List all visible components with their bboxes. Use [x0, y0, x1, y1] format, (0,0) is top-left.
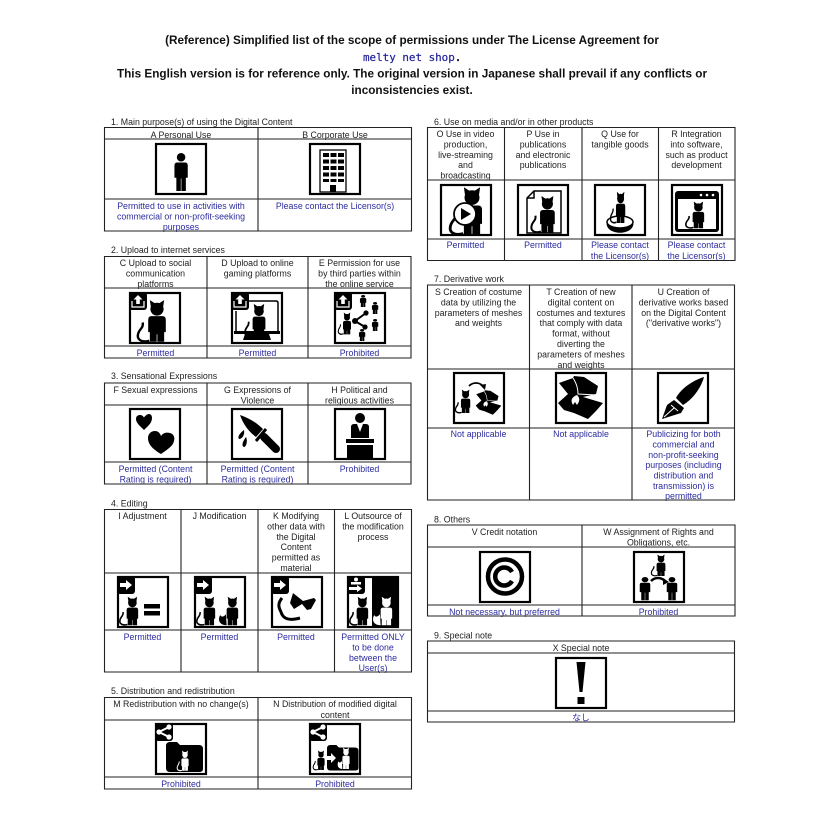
column U labels: Publicizing for both [646, 429, 721, 439]
icon: publication [518, 185, 568, 235]
column L labels: L Outsource of [344, 511, 402, 521]
column X labels: なし [572, 712, 590, 722]
heading: section 2: 2. Upload to internet services [111, 245, 226, 255]
column A labels: A Personal Use [151, 130, 211, 140]
column K labels: Permitted [277, 632, 315, 642]
column A labels: commercial or non-profit-seeking [117, 212, 245, 222]
heading: section 3: 3. Sensational Expressions [111, 371, 218, 381]
column Q labels: Q Use for [601, 129, 639, 139]
column U labels: distribution and [654, 471, 713, 481]
column P labels: and electronic [516, 150, 571, 160]
column Q labels: tangible goods [591, 139, 649, 149]
column E labels: Prohibited [340, 348, 379, 358]
column D labels: Permitted [239, 348, 276, 358]
title [117, 34, 707, 97]
heading: section 1: 1. Main purpose(s) of using the Digital Content [111, 117, 293, 127]
column R labels: such as product [665, 150, 728, 160]
column V labels: V Credit notation [472, 527, 537, 537]
column U labels: transmission) is [653, 481, 715, 491]
icon: assignment [634, 552, 684, 602]
title: This English version is for reference only. The original version in Japanese shall prevail if any conflicts or [117, 68, 707, 80]
icon: exclamation [556, 658, 606, 708]
icon: hearts [130, 409, 180, 459]
column V labels: Not necessary, but preferred [449, 607, 560, 617]
column N labels: Prohibited [315, 779, 355, 789]
column U labels: on the Digital Content [641, 308, 726, 318]
heading: section 9: 9. Special note [434, 630, 492, 640]
column L labels: the modification [342, 521, 404, 531]
icon: redistribution [155, 723, 206, 774]
column H labels [325, 385, 395, 474]
column A labels: purposes [163, 222, 200, 232]
icon: upload gaming [231, 292, 282, 343]
heading: section 7: 7. Derivative work [434, 274, 505, 284]
column P labels: Permitted [524, 240, 562, 250]
panel: 2. upload [104, 245, 411, 358]
column E labels [318, 258, 401, 358]
column M labels [113, 699, 249, 789]
column G labels: G Expressions of [224, 385, 292, 395]
column D labels [221, 258, 294, 358]
column S labels: and weights [455, 318, 503, 328]
column L labels: between the [349, 653, 397, 663]
column N labels: N Distribution of modified digital [273, 699, 397, 709]
column S labels: S Creation of costume [435, 287, 522, 297]
icon: copyright [480, 552, 530, 602]
column T labels: diverting the [557, 339, 605, 349]
column K labels [267, 511, 325, 642]
column V labels [449, 527, 560, 617]
column K labels: permitted as [272, 553, 321, 563]
column I labels: I Adjustment [118, 511, 167, 521]
panel: 8. others [428, 514, 735, 617]
title: (Reference) Simplified list of the scope of permissions under The License Agreement for [165, 34, 659, 47]
column P labels: publications [520, 160, 567, 170]
column K labels: K Modifying [273, 511, 319, 521]
column I labels: Permitted [124, 632, 161, 642]
column E labels: the online service [325, 279, 394, 289]
panel: 9. special note [428, 630, 734, 722]
column X labels: X Special note [553, 643, 609, 653]
heading: section 6: 6. Use on media and/or in other products [434, 117, 594, 127]
icon: person [156, 144, 206, 194]
panel: 1. main purpose [104, 117, 412, 232]
column W labels [603, 527, 714, 617]
title: inconsistencies exist. [351, 84, 473, 97]
column R labels: into software, [670, 139, 723, 149]
column R labels: the Licensor(s) [667, 251, 726, 261]
column C labels: Permitted [137, 348, 174, 358]
column U labels: commercial and [652, 439, 715, 449]
column X labels [553, 643, 609, 722]
icon: pen [658, 373, 708, 423]
column J labels: J Modification [193, 511, 246, 521]
column H labels: religious activities [325, 396, 395, 406]
column G labels [221, 385, 295, 484]
column R labels: development [671, 160, 722, 170]
column F labels [113, 385, 198, 484]
column U labels [639, 287, 728, 501]
column O labels: live-streaming [438, 150, 493, 160]
column T labels: format, without [552, 329, 610, 339]
column O labels: production, [444, 139, 487, 149]
column T labels: costumes and textures [537, 308, 626, 318]
column W labels: Obligations, etc. [627, 538, 690, 548]
icon: other data [271, 576, 322, 627]
column C labels [120, 258, 191, 358]
icon: podium speaker [335, 409, 385, 459]
column U labels: permitted [665, 491, 702, 501]
column D labels: D Upload to online [221, 258, 294, 268]
column R labels: R Integration [671, 129, 722, 139]
column T labels: that comply with data [540, 318, 622, 328]
column O labels: broadcasting [440, 171, 491, 181]
column T labels: parameters of meshes [537, 349, 625, 359]
column S labels: Not applicable [451, 429, 506, 439]
column G labels: Violence [241, 396, 274, 406]
panel: 3. sensational expressions [104, 371, 411, 484]
column H labels: H Political and [331, 385, 388, 395]
column H labels: Prohibited [340, 464, 379, 474]
column K labels: Content [281, 542, 312, 552]
column W labels: Prohibited [639, 607, 678, 617]
column N labels: content [321, 710, 350, 720]
column A labels [117, 130, 245, 232]
icon: building [310, 144, 360, 194]
icon: modified distribution [309, 723, 360, 774]
column L labels: to be done [352, 642, 394, 652]
column S labels: data by utilizing the [441, 297, 516, 307]
icon: adjustment [117, 576, 168, 627]
column K labels: the Digital [276, 532, 316, 542]
icon: modification [194, 576, 245, 627]
column L labels: Permitted ONLY [341, 632, 405, 642]
column C labels: C Upload to social [120, 258, 191, 268]
panel: 7. derivative work [428, 274, 734, 501]
column O labels: O Use in video [437, 129, 494, 139]
column B labels [276, 130, 394, 211]
column W labels: W Assignment of Rights and [603, 527, 714, 537]
column F labels: F Sexual expressions [113, 385, 198, 395]
icon: costume [556, 373, 606, 423]
heading: section 4: 4. Editing [111, 498, 148, 508]
column T labels: digital content on [548, 297, 614, 307]
column U labels: U Creation of [658, 287, 710, 297]
heading: section 8: 8. Others [434, 514, 471, 524]
column N labels [273, 699, 397, 789]
icon: software window [672, 185, 722, 235]
column C labels: platforms [137, 279, 174, 289]
column S labels: parameters of meshes [435, 308, 523, 318]
column U labels: non-profit-seeking [648, 450, 719, 460]
title: melty net shop. [363, 51, 461, 64]
panel: 5. distribution [104, 686, 412, 789]
column S labels [435, 287, 523, 439]
column L labels: User(s) [359, 663, 387, 673]
panel: 6. media [428, 117, 735, 261]
column U labels: ("derivative works") [646, 318, 721, 328]
column R labels [665, 129, 728, 261]
column L labels [341, 511, 405, 673]
column G labels: Permitted (Content [221, 464, 295, 474]
column T labels: Not applicable [553, 429, 609, 439]
column O labels [437, 129, 494, 250]
column O labels: and [458, 160, 473, 170]
column K labels: material [280, 563, 312, 573]
column F labels: Permitted (Content [119, 464, 193, 474]
column A labels: Permitted to use in activities with [117, 201, 245, 211]
column Q labels: the Licensor(s) [591, 251, 649, 261]
heading: section 5: 5. Distribution and redistribution [111, 686, 235, 696]
column P labels: P Use in [526, 129, 560, 139]
column P labels: publications [520, 139, 567, 149]
column P labels [516, 129, 571, 250]
icon: costume from mesh [454, 373, 504, 423]
column T labels [537, 287, 626, 439]
icon: knife [232, 409, 282, 459]
column M labels: Prohibited [161, 779, 201, 789]
column J labels [193, 511, 246, 642]
column J labels: Permitted [201, 632, 238, 642]
column F labels: Rating is required) [120, 474, 192, 484]
icon: upload social [129, 292, 180, 343]
column Q labels [591, 129, 649, 261]
column U labels: derivative works based [639, 297, 728, 307]
column I labels [118, 511, 167, 642]
panel: 4. editing [104, 498, 412, 673]
icon: outsource [347, 576, 399, 627]
icon: video [441, 185, 491, 235]
column K labels: other data with [267, 521, 325, 531]
column L labels: process [358, 532, 389, 542]
column Q labels: Please contact [591, 240, 649, 250]
column C labels: communication [126, 268, 185, 278]
column E labels: E Permission for use [319, 258, 400, 268]
column U labels: purposes (including [645, 460, 722, 470]
column B labels: Please contact the Licensor(s) [276, 201, 394, 211]
column T labels: and weights [558, 360, 605, 370]
icon: tangible goods [595, 185, 645, 235]
column M labels: M Redistribution with no change(s) [113, 699, 249, 709]
column R labels: Please contact [668, 240, 726, 250]
column G labels: Rating is required) [222, 474, 294, 484]
column T labels: T Creation of new [546, 287, 616, 297]
column O labels: Permitted [447, 240, 484, 250]
icon: third parties [334, 292, 385, 343]
column D labels: gaming platforms [224, 268, 292, 278]
column B labels: B Corporate Use [302, 130, 368, 140]
column E labels: by third parties within [318, 268, 401, 278]
